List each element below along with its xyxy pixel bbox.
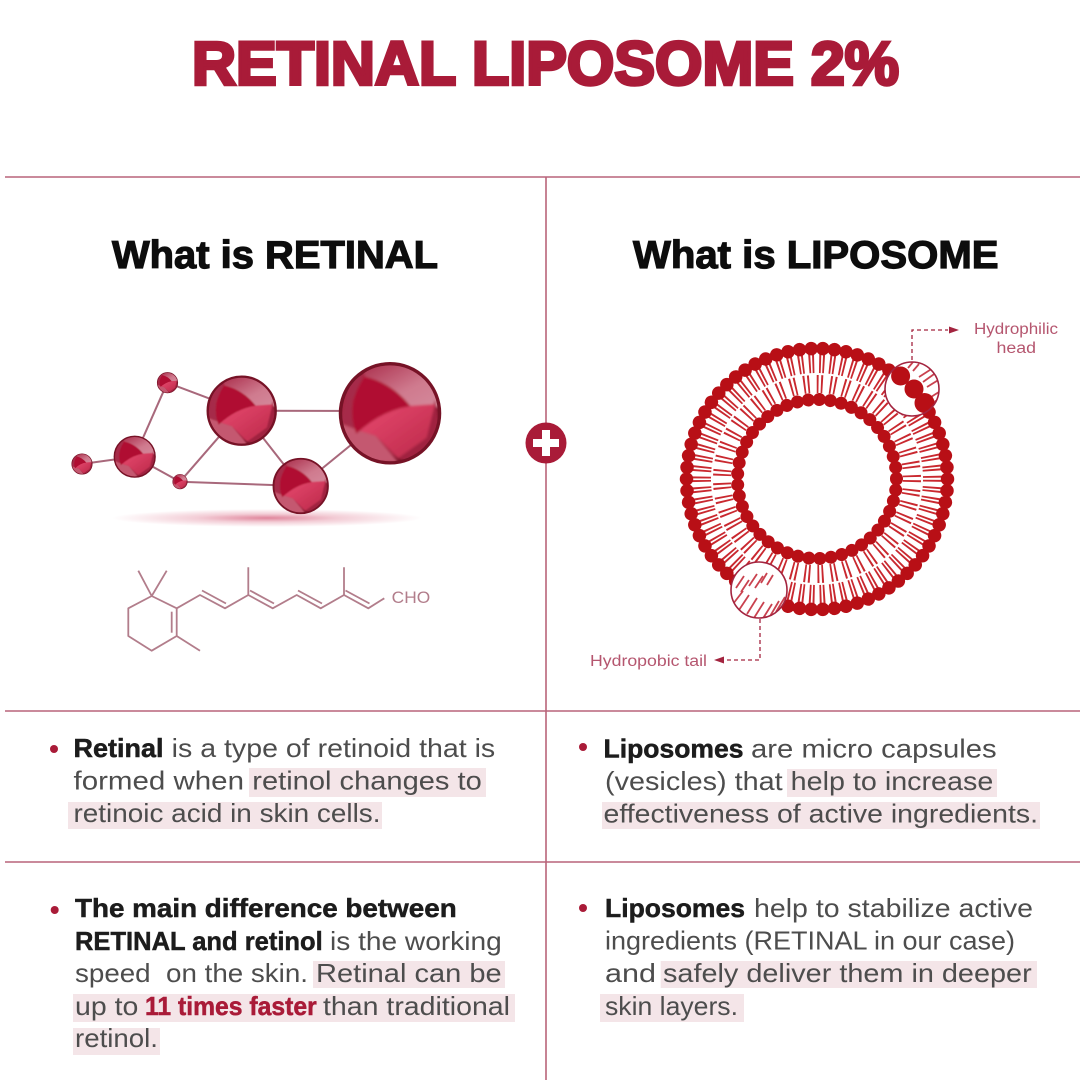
text block: liposome definition: [579, 734, 1040, 829]
magnifier: hydrophobic tail detail: [731, 562, 787, 620]
text block: liposome delivery: Liposomes: [605, 893, 745, 923]
text block: liposome delivery: help to stabilize active: [754, 893, 1033, 923]
magnifier: hydrophilic head detail: [885, 362, 944, 416]
text block: retinal vs retinol: [51, 893, 515, 1055]
text block: retinal vs retinol: than traditional: [323, 991, 510, 1021]
title: RETINAL LIPOSOME 2%: [192, 30, 899, 98]
text block: liposome delivery: skin layers.: [605, 991, 738, 1021]
text block: liposome definition: effectiveness of active ingredients.: [604, 798, 1038, 828]
text block: liposome definition: are micro capsules: [751, 734, 997, 764]
text block: retinal vs retinol: speed on the skin.: [75, 958, 308, 988]
text block: liposome definition: (vesicles) that: [605, 766, 784, 796]
text block: retinal definition: Retinal: [74, 733, 164, 763]
text block: retinal definition: [50, 733, 495, 829]
text block: retinal vs retinol: retinol.: [75, 1023, 158, 1053]
text block: liposome delivery: safely deliver them in deeper: [663, 958, 1032, 988]
callout: hydrophilic head: Hydrophilic: [974, 321, 1058, 338]
text block: retinal definition: retinol changes to: [252, 766, 482, 796]
text block: retinal vs retinol: RETINAL and retinol: [75, 926, 323, 956]
heading: what is liposome: What is LIPOSOME: [633, 234, 998, 277]
callout: hydrophilic head: head: [996, 340, 1036, 357]
text block: retinal definition: is a type of retinoid that is: [172, 733, 495, 763]
text block: retinal definition: formed when: [74, 766, 244, 796]
text block: liposome delivery: [579, 893, 1037, 1022]
text block: liposome delivery: ingredients (RETINAL in our case): [605, 926, 1015, 956]
illustration: retinal chemical structure: [128, 567, 430, 651]
heading: what is retinal: What is RETINAL: [112, 234, 438, 277]
text block: retinal vs retinol: is the working: [330, 926, 502, 956]
text block: liposome definition: help to increase: [791, 766, 993, 796]
text block: retinal vs retinol: The main difference between: [75, 893, 457, 923]
callout: hydrophobic tail: Hydropobic tail: [590, 653, 707, 670]
icon: plus badge: [526, 422, 566, 464]
text block: retinal definition: retinoic acid in skin cells.: [74, 798, 380, 828]
text block: liposome delivery: and: [605, 958, 656, 988]
callout: hydrophilic head: [912, 321, 1058, 360]
illustration: retinal chemical structure: CHO: [392, 588, 430, 607]
illustration: retinal molecule spheres: [72, 362, 441, 527]
illustration: liposome bilayer ring: [686, 348, 948, 620]
text block: retinal vs retinol: 11 times faster: [145, 991, 317, 1021]
callout: hydrophobic tail: [590, 619, 760, 670]
text block: liposome definition: Liposomes: [604, 734, 744, 764]
text block: retinal vs retinol: Retinal can be: [316, 958, 502, 988]
text block: retinal vs retinol: up to: [75, 991, 138, 1021]
